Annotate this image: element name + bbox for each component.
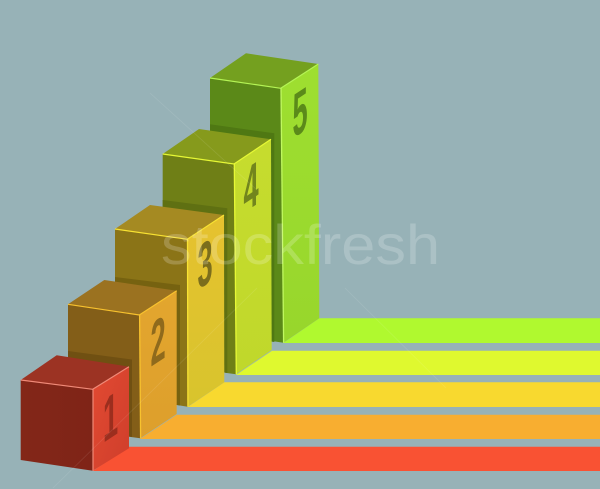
stripe: yellow [188, 382, 600, 407]
stripe: green [283, 318, 600, 343]
bar 2 [68, 280, 177, 438]
bar 1 [21, 355, 129, 471]
digit 1: 1 [103, 377, 118, 457]
bar 3 [115, 205, 224, 407]
digit 5: 5 [292, 72, 308, 152]
bar 5 [210, 53, 319, 343]
digit 3: 3 [198, 224, 213, 304]
stripe: lime [236, 351, 600, 375]
digit 2: 2 [150, 301, 166, 381]
watermark: stockfresh [161, 213, 440, 276]
stripe: red [93, 447, 600, 471]
stripes [93, 318, 600, 471]
bar 4 [163, 129, 272, 374]
stripe: orange [140, 415, 600, 439]
watermark [53, 93, 446, 488]
digit 4: 4 [244, 147, 259, 227]
